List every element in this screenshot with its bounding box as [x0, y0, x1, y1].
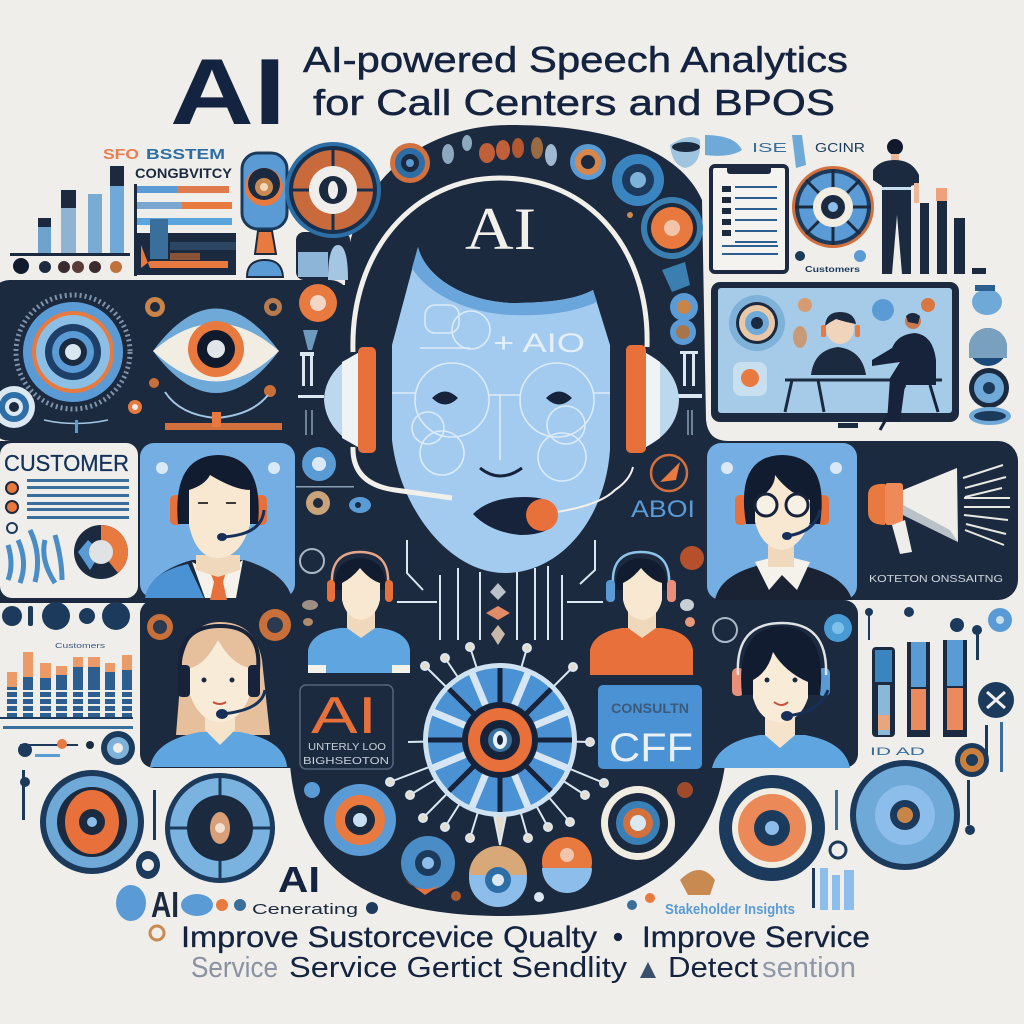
icon: large eye	[153, 308, 279, 393]
avatar: center-left operator	[308, 552, 410, 673]
detection caption: Detect	[668, 952, 758, 984]
dark central backdrop	[0, 125, 1018, 916]
bottom-left AI generating group	[116, 859, 378, 925]
icon: small server block	[296, 232, 350, 280]
small rings between outer dials	[20, 770, 975, 879]
panel: system connectivity chart: CONGBVITCY	[135, 165, 233, 181]
bottom-right blurred caption: Stakeholder Insights	[665, 901, 795, 918]
standing figure	[873, 139, 919, 274]
right ear cup	[626, 345, 679, 453]
right edge icons	[969, 285, 1011, 425]
right middle icons and ABOI label: ABOI	[631, 496, 695, 523]
panel: top-left bar chart	[10, 166, 130, 274]
panel: system connectivity chart: BSSTEM	[146, 146, 225, 163]
eyes	[432, 392, 572, 404]
top-right icons and caption: ISE	[752, 140, 788, 155]
title block: AI-powered Speech Analytics	[303, 39, 848, 80]
clipboard checklist	[711, 164, 787, 272]
left ear cup	[324, 347, 376, 453]
left column glyphs	[298, 330, 324, 435]
avatar: dark-haired agent	[712, 614, 852, 768]
panel: avatar male agent	[140, 443, 295, 600]
outer ring center-right	[719, 775, 825, 881]
top-right icons and caption	[670, 135, 866, 274]
detection caption: sention	[762, 952, 856, 984]
bottom-left AI generating group: Cenerating	[252, 901, 358, 918]
panel: lower-left striped bar chart	[0, 602, 135, 765]
AI label on head: AI	[465, 196, 536, 262]
seated person left	[811, 312, 866, 375]
title block: for Call Centers and BPOS	[313, 82, 835, 123]
mouth	[480, 468, 522, 476]
badge: CFF card: CFF	[609, 726, 693, 770]
face details	[392, 305, 610, 481]
improve service caption: Improve Service	[642, 921, 870, 954]
panel: system connectivity chart	[103, 146, 236, 276]
bottom-left AI generating group: AI	[151, 884, 179, 925]
top-right icons and caption: GCINR	[815, 140, 865, 155]
icon: orange badge	[299, 284, 337, 322]
outer ring center-left	[165, 773, 275, 883]
title block	[170, 39, 848, 144]
improve service caption	[150, 921, 870, 954]
bottom-left AI generating group: AI	[278, 859, 320, 900]
detection caption: Service Gertict Sendlity	[289, 952, 628, 984]
outer ring right	[850, 760, 960, 870]
badge: AI product card: BIGHSEOTON	[303, 756, 389, 767]
top-right icons and caption: Customers	[805, 265, 861, 274]
icons: top arc rings around the head	[390, 135, 664, 218]
badge: AI product card	[300, 685, 393, 769]
central wheel diagram	[386, 643, 608, 845]
outer ring left	[40, 770, 144, 874]
avatar: center-right operator	[590, 552, 693, 675]
panel: customer card	[0, 443, 138, 598]
panel: left radar dial	[16, 295, 130, 433]
target wheel top right	[792, 166, 874, 248]
panel: lower-right bars: ID AD	[870, 746, 925, 758]
bottom-right blurred caption	[627, 868, 854, 918]
microphone boom	[353, 447, 452, 498]
icon: megaphone panel: KOTETON ONSSAITNG	[869, 574, 1003, 585]
title block: AI	[170, 39, 286, 144]
top-right dark bars	[920, 188, 986, 274]
panel: customer avatar right with glasses	[707, 443, 857, 600]
detection caption: Service	[191, 952, 278, 984]
monitor with meeting scene	[711, 282, 959, 430]
headset	[324, 178, 679, 535]
right column rings	[641, 197, 703, 435]
bottom dark-arc rings	[304, 782, 693, 907]
panel: system connectivity chart: SFO	[103, 146, 139, 163]
right middle icons and ABOI label	[631, 455, 704, 627]
detection caption	[191, 952, 856, 984]
desk	[785, 380, 942, 412]
circuit lines from the microphone	[397, 540, 603, 640]
badge: CFF card: CONSULTN	[611, 700, 689, 716]
badge: CFF card	[598, 685, 702, 770]
avatar: blonde agent	[147, 609, 291, 767]
panel: lower-right bars	[865, 607, 1014, 777]
badge: AI product card: AI	[311, 687, 377, 745]
central AI agent head	[392, 247, 610, 573]
microphone	[473, 497, 558, 535]
icon: camera on stand	[242, 153, 287, 277]
icon: megaphone panel	[868, 465, 1010, 585]
face label: + AIO	[493, 328, 585, 358]
panel: customer card: CUSTOMER	[4, 450, 129, 476]
left middle rings	[296, 447, 371, 626]
screen ring	[729, 295, 785, 351]
seated person right	[872, 313, 938, 430]
panel: lower-left striped bar chart: Customers	[55, 643, 106, 650]
screen badges	[733, 298, 935, 396]
face	[392, 247, 610, 573]
center circuit motif	[486, 583, 510, 645]
eye panel details	[128, 297, 282, 430]
improve service caption: Improve Sustorcevice Qualty	[181, 921, 597, 954]
icon: target dial top left	[285, 142, 381, 238]
forehead shading	[412, 247, 597, 315]
icon: small ring left edge	[0, 386, 35, 428]
badge: AI product card: UNTERLY LOO	[308, 742, 386, 753]
